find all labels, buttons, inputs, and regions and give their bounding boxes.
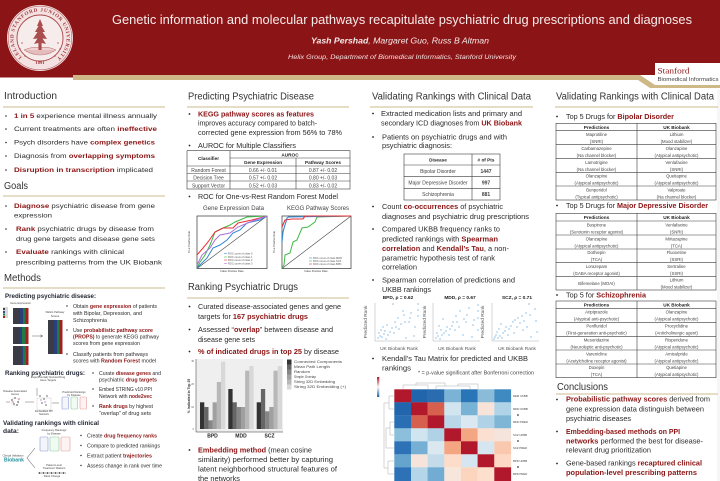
- chart: percent of indicated drugs in top 25: SCZ: [264, 434, 274, 440]
- bullet list: ranking: targets for 167 psychiatric drugs: [198, 312, 308, 321]
- subheading: validating rankings: Validating rankings with clinical: [3, 420, 99, 427]
- table: major depressive disorder drugs: Lithium: [670, 278, 684, 283]
- bullet: embedding method: Embedding method (mean cosine: [198, 446, 312, 455]
- table: bipolar disorder drugs: Valproate: [667, 187, 686, 192]
- bullet list: conclusions: population-level prescribing patterns: [566, 468, 697, 477]
- bullet: Kendall's Tau matrix: Kendall’s Tau Matrix for predicted and UKBB: [382, 354, 528, 363]
- subheading: validating rankings: data:: [3, 428, 19, 435]
- bullet list: ranking: Curated disease-associated genes and gene: [198, 302, 341, 311]
- bullet list: comparison methods: Compared UKBB frequency ranks to: [382, 225, 500, 234]
- bullet list: predicting disease: (PROPS) to generate KEGG pathway: [73, 334, 159, 340]
- chart: ROC gene expression data: ROC curve of class 2: [228, 258, 253, 262]
- bullet list: comparison methods: correlation and Kendall’s Tau, a non-: [382, 244, 510, 253]
- bullet list: UK Biobank extraction: Extracted medication lists and primary and: [381, 109, 522, 118]
- table: major depressive disorder drugs: (SSRI): [670, 271, 684, 276]
- table: bipolar disorder drugs: Lamotrigine: [585, 160, 608, 165]
- bullet: embedding method: [189, 446, 338, 481]
- table: schizophrenia drugs: (Atypical antipsychotic): [655, 317, 699, 322]
- icon: Stanford university seal: LELAND STANFORD JUNIOR UNIVERSITY: [10, 8, 70, 61]
- chart: ROC gene expression data: True Positive Rate: [187, 230, 191, 253]
- bullet list: predicting disease: scores with Random Forest model: [73, 358, 156, 364]
- table: bipolar disorder drugs: UK Biobank: [663, 125, 690, 130]
- bullet list: ranking drugs: “overlap” of drug sets: [99, 411, 151, 417]
- bullet list: KEGG features: KEGG pathway scores as features: [198, 110, 314, 118]
- table: schizophrenia drugs: Mesoridazine: [584, 338, 610, 342]
- table: patients by disease: 1447: [480, 169, 492, 175]
- table: major depressive disorder drugs: (SNRI): [670, 229, 684, 234]
- subheading: ranking psychiatric drugs: Ranking psychiatric drugs:: [5, 370, 85, 377]
- affiliation: Helix Group, Department of Biomedical Informatics, Stanford University: [288, 54, 517, 61]
- chart: MDD scatter: [422, 295, 480, 352]
- logo: Stanford Biomedical Informatics: Stanford: [658, 66, 690, 76]
- diagram: clinical validation workflow: by Disease: [47, 432, 61, 436]
- bullet list: conclusions: Probabilistic pathway scores derived from: [566, 395, 710, 404]
- table: bipolar disorder drugs: (Atypical antipsychotic): [575, 181, 619, 186]
- header banner: [0, 0, 720, 88]
- table: major depressive disorder drugs: (GABA receptor agonist): [573, 271, 620, 276]
- table: bipolar disorder drugs: (Mood stabilizer): [661, 139, 693, 144]
- table: AUROC for classifiers: 0.83 +/- 0.02: [309, 183, 337, 189]
- diagram: gene expression to pathway scores: Gene Expression: [10, 301, 31, 305]
- table: AUROC for classifiers: Gene Expression: [244, 160, 282, 165]
- chart: ROC gene expression data: ROC curve of class 3: [228, 261, 253, 265]
- chart: Kendall's Tau heatmap: *: [517, 414, 519, 420]
- bullet list: conclusions: relevant drug prioritization: [566, 446, 651, 455]
- bullet list: introduction: 1 in 5 experience mental illness annually: [14, 113, 158, 120]
- table: bipolar disorder drugs: Carbamazepine: [581, 146, 612, 151]
- bullet list: goals: Diagnose psychiatric disease from gene: [14, 203, 155, 210]
- diagram: drug ranking workflow: by Disease: [67, 393, 81, 397]
- diagram: drug ranking workflow: Predicted Rankings: [62, 390, 86, 394]
- table: schizophrenia drugs: Quetiapine: [666, 365, 687, 370]
- table: bipolar disorder drugs: (SNRI): [590, 139, 604, 144]
- chart: Kendall's Tau heatmap: SCZ PRED: [513, 446, 527, 450]
- table: schizophrenia drugs: Procyclidine: [665, 324, 689, 329]
- chart: Kendall's Tau heatmap: *: [517, 440, 519, 446]
- chart: percent of indicated drugs in top 25: BPD: [207, 434, 218, 440]
- chart: SCZ scatter: Predicted Rank: [480, 305, 486, 338]
- heading: methods: Methods: [4, 273, 41, 284]
- chart: ROC gene expression data: Gene Expression Data: [203, 205, 264, 212]
- table: major depressive disorder drugs: (SSRI): [670, 257, 684, 262]
- table: schizophrenia drugs: (Neuroleptic anti-psychotic): [570, 344, 623, 350]
- diagram: clinical validation workflow: [2, 428, 70, 478]
- bullet list: introduction: Disruption in transcription implicated: [14, 167, 153, 174]
- bullet list: predicting disease: scores from gene expression: [73, 341, 140, 347]
- bullet list: goals: prescribing patterns from the UK Biobank: [16, 260, 163, 266]
- diagram: drug ranking workflow: [3, 375, 86, 416]
- table: AUROC for classifiers: 0.80 +/- 0.03: [309, 175, 337, 181]
- bullet list: ranking: % of indicated drugs in top 25 by disease: [198, 347, 339, 356]
- table: major depressive disorder drugs: Sertraline: [667, 264, 686, 269]
- chart: ROC gene expression data: False Positive Rate: [220, 269, 244, 273]
- table: patients by disease: Major Depressive Disorder: [408, 180, 468, 186]
- table: major depressive disorder drugs: (TCA): [671, 243, 683, 248]
- table: major depressive disorder drugs: Predictions: [584, 215, 610, 220]
- bullet list: comparison methods: correlation: [382, 263, 417, 272]
- table: major depressive disorder drugs: Dothiepin: [587, 250, 606, 255]
- chart: BPD scatter: [363, 295, 420, 352]
- legend: ranking methods: String 32D Embedding: [294, 380, 335, 384]
- title: Genetic information and molecular pathways recapitulate psychiatric drug prescriptions and diagnoses: [112, 12, 692, 27]
- bullet list: ranking: [189, 302, 341, 356]
- chart: ROC gene expression data: ROC curve of class 1: [228, 255, 253, 259]
- chart: percent of indicated drugs in top 25: 20: [191, 383, 195, 386]
- icon: Stanford university seal: 1891: [35, 60, 45, 65]
- bullet list: comparison methods: Spearman correlation of predictions and: [382, 275, 515, 284]
- table: major depressive disorder drugs: Mirtazapine: [665, 236, 688, 241]
- table: bipolar disorder drugs: (Na channel blocker): [577, 153, 617, 158]
- heading: validating rankings: Validating Rankings with Clinical Data: [372, 92, 531, 102]
- bullet list: conclusions: networks performed the best for disease-: [566, 436, 704, 445]
- bullet list: goals: [5, 203, 163, 266]
- bullet list: KEGG features: [189, 110, 342, 150]
- table: patients by disease: Disease: [429, 158, 447, 162]
- table: AUROC for classifiers: 0.66 +/- 0.01: [249, 168, 277, 174]
- bullet list: conclusions: gene expression data distinguish between: [566, 405, 704, 414]
- chart: Kendall's Tau heatmap: MDD UKBB: [513, 407, 528, 411]
- subheading: bipolar disorder: Top 5 Drugs for Bipolar Disorder: [566, 112, 674, 121]
- chart: ROC gene expression data: ROC curve of class 0: [228, 252, 253, 256]
- bullet list: comparison methods: diagnoses and psychiatric drug prescriptions: [382, 212, 529, 221]
- table: patients by disease: [404, 154, 500, 200]
- table: schizophrenia drugs: Varenicline: [586, 351, 608, 356]
- bullet list: predicting disease: Use probabilistic pathway score: [73, 328, 153, 334]
- bullet list: ranking drugs: Network with node2vec: [99, 394, 152, 400]
- table: schizophrenia drugs: (Atypical antipsychotic): [655, 358, 699, 363]
- table: schizophrenia drugs: (First-generation anti-psychotic): [566, 331, 627, 336]
- bullet list: goals: Rank psychiatric drugs by disease from: [16, 226, 154, 233]
- bullet list: predicting disease: Obtain gene expression of patients: [73, 304, 157, 310]
- chart: ROC KEGG pathway scores: [272, 205, 351, 273]
- chart: Kendall's Tau heatmap: DEM UKBB: [513, 394, 528, 398]
- table: patients by disease: Bipolar Disorder: [420, 169, 456, 175]
- table: bipolar disorder drugs: (Atypical antipsychotic): [655, 181, 699, 186]
- table: AUROC for classifiers: Support Vector: [192, 183, 225, 189]
- chart: ROC KEGG pathway scores: KEGG Pathway Scores: [287, 205, 349, 212]
- diagram: clinical validation workflow: Biobank: [4, 458, 25, 464]
- table: major depressive disorder drugs: (Mood stabilizer): [661, 284, 693, 290]
- subheading: schizophrenia: Top 5 for Schizophrenia: [566, 290, 647, 300]
- bullet list: comparison methods: predicted rankings with Spearman: [382, 234, 498, 243]
- table: bipolar disorder drugs: (Na channel blocker): [657, 194, 697, 199]
- table: major depressive disorder drugs: (TCA): [591, 257, 603, 262]
- bullet list: UK Biobank extraction: psychiatric diagnosis:: [382, 141, 452, 150]
- table: AUROC for classifiers: Pathway Scores: [305, 160, 341, 165]
- chart: percent of indicated drugs in top 25: 0: [193, 428, 195, 431]
- bullet list: comparison methods: [372, 202, 529, 294]
- table: major depressive disorder drugs: [556, 213, 716, 290]
- chart: ROC gene expression data: [187, 205, 267, 273]
- table: AUROC for classifiers: [187, 151, 350, 189]
- bullet list: predicting disease: Schizophrenia: [73, 318, 108, 324]
- legend: ranking methods: Connected Components: [294, 360, 342, 364]
- table: AUROC for classifiers: AUROC: [281, 152, 299, 157]
- table: bipolar disorder drugs: (SNRI): [670, 167, 684, 172]
- chart: ROC KEGG pathway scores: ROC curve of class SCZ: [313, 259, 342, 263]
- logo: Stanford Biomedical Informatics: Biomedical Informatics: [658, 77, 719, 83]
- bullet list: KEGG features: corrected gene expression from 56% to 78%: [198, 128, 342, 137]
- table: schizophrenia drugs: Predictions: [584, 302, 610, 308]
- subheading: validating rankings: [3, 420, 99, 435]
- table: major depressive disorder drugs: UK Biobank: [663, 215, 690, 220]
- chart: Kendall's Tau heatmap: BPD PRED: [513, 472, 527, 476]
- diagram: drug ranking workflow: Experimentally Derived Drug: [31, 375, 66, 379]
- bullet list: goals: drug gene targets and disease gene sets: [16, 236, 156, 243]
- chart: percent of indicated drugs in top 25: MDD: [235, 434, 247, 440]
- table: bipolar disorder drugs: Venlafaxine: [665, 160, 688, 165]
- diagram: drug ranking workflow: Genes: [11, 392, 20, 396]
- table: patients by disease: Schizophrenia: [422, 192, 454, 198]
- heading: introduction: Introduction: [4, 91, 57, 102]
- diagram: gene expression to pathway scores: KEGG Pathway: [46, 310, 65, 314]
- chart: Kendall's Tau heatmap: MDD PRED: [513, 420, 528, 424]
- table: major depressive disorder drugs: Buspirone: [587, 222, 607, 227]
- chart: BPD scatter: BPD, ρ = 0.62: [383, 295, 414, 301]
- table: bipolar disorder drugs: [556, 123, 716, 200]
- chart: ROC KEGG pathway scores: ROC curve of class MDD: [313, 256, 342, 260]
- note: significance: * = p-value significant after Bonferroni correction: [418, 371, 534, 377]
- diagram: gene expression to pathway scores: [3, 301, 65, 365]
- table: schizophrenia drugs: Amisulpride: [665, 351, 688, 356]
- chart: ROC KEGG pathway scores: True Positive Rate: [272, 230, 276, 253]
- bullet: embedding method: latent neighborhood structural features of: [198, 465, 338, 474]
- table: patients by disease: # of Pts: [478, 158, 495, 162]
- diagram: clinical validation workflow: Rank Change: [44, 474, 61, 478]
- diagram: clinical validation workflow: Frequency Rankings: [42, 428, 67, 432]
- bullet list: KEGG features: AUROC for Multiple Classifiers: [198, 141, 296, 150]
- diagram: clinical validation workflow: Patient-Level: [46, 463, 62, 467]
- bullet list: introduction: Psych disorders have complex genetics: [14, 140, 155, 146]
- bullet list: introduction: Current treatments are often ineffective: [14, 126, 157, 133]
- table: bipolar disorder drugs: Maprotiline: [586, 132, 608, 137]
- chart: SCZ scatter: [480, 295, 539, 352]
- table: bipolar disorder drugs: Olanzapine: [586, 174, 608, 179]
- bullet list: predicting disease: with Bipolar, Depression, and: [72, 311, 142, 317]
- table: patients by disease: 881: [482, 192, 490, 198]
- table: schizophrenia drugs: Penfluridol: [586, 324, 607, 329]
- table: schizophrenia drugs: (Anticholinergic agent): [655, 331, 698, 336]
- table: bipolar disorder drugs: Quetiapine: [666, 174, 687, 179]
- table: major depressive disorder drugs: Fluoxetine: [667, 250, 687, 255]
- bullet: Kendall's Tau matrix: rankings: [382, 364, 411, 373]
- table: AUROC for classifiers: Random Forest: [191, 168, 226, 174]
- chart: Kendall's Tau heatmap: *: [517, 466, 519, 472]
- table: schizophrenia drugs: (TCA): [591, 372, 603, 377]
- bullet list: ranking drugs: Rank drugs by highest: [99, 404, 153, 410]
- bullet list: validating rankings: Compare to predicted rankings: [87, 444, 160, 450]
- bullet: embedding method: similarity) performed better by capturing: [198, 455, 333, 464]
- authors: Yash Pershad , Margaret Guo, Russ B Altman: [311, 36, 489, 46]
- chart: percent of indicated drugs in top 25: 10: [191, 406, 195, 409]
- chart: MDD scatter: MDD, ρ = 0.67: [444, 295, 476, 301]
- heading: conclusions: Conclusions: [557, 382, 608, 393]
- table: schizophrenia drugs: (Atypical antipsychotic): [655, 372, 699, 377]
- table: schizophrenia drugs: Risperidone: [665, 338, 689, 342]
- bullet list: UK Biobank extraction: [372, 109, 523, 150]
- bullet list: ranking drugs: [92, 371, 161, 417]
- chart: Kendall's Tau heatmap: [377, 377, 528, 481]
- table: patients by disease: 997: [482, 180, 490, 186]
- table: bipolar disorder drugs: Predictions: [584, 125, 610, 130]
- heading: predicting psychiatric disease: Predicting Psychiatric Disease: [188, 92, 314, 102]
- table: AUROC for classifiers: 0.52 +/- 0.03: [249, 183, 277, 189]
- panel: top drugs tables: [555, 92, 718, 378]
- table: major depressive disorder drugs: Venlafaxine: [665, 222, 688, 227]
- table: AUROC for classifiers: 0.87 +/- 0.02: [309, 168, 337, 174]
- legend: ranking methods: [287, 360, 346, 390]
- table: schizophrenia drugs: Olanzapine: [666, 310, 688, 315]
- diagram: clinical validation workflow: Clinical Validation: [2, 454, 24, 458]
- legend: ranking methods: Mean Path Length: [294, 365, 330, 369]
- bullet list: ranking drugs: psychiatric drug targets: [99, 378, 157, 384]
- panel: validating rankings with clinical data: [363, 92, 539, 481]
- chart: ROC KEGG pathway scores: ROC curve of class BPD: [313, 262, 342, 266]
- chart: Kendall's Tau heatmap: BPD UKBB: [513, 459, 527, 463]
- bullet list: conclusions: Gene-based rankings recaptured clinical: [566, 459, 702, 468]
- bullet list: UK Biobank extraction: secondary ICD diagnoses from UK Biobank: [381, 118, 523, 128]
- bullet list: validating rankings: Extract patient trajectories: [87, 454, 152, 460]
- legend: ranking methods: Simple Overlap: [294, 375, 316, 379]
- table: bipolar disorder drugs: Benperidol: [586, 187, 607, 192]
- table: schizophrenia drugs: (Acetylcholine receptor agonist): [566, 358, 627, 363]
- logo: Stanford Biomedical Informatics: [655, 63, 720, 85]
- subheading: major depressive disorder: Top 5 Drugs for Major Depressive Disorder: [566, 201, 708, 210]
- bullet list: ranking: Assessed “overlap” between disease and: [198, 325, 333, 334]
- bullet list: comparison methods: parametric hypothesis test of rank: [382, 253, 495, 262]
- table: AUROC for classifiers: Classifier: [198, 156, 219, 161]
- bullet: Kendall's Tau matrix: [372, 354, 528, 373]
- panel: predicting psychiatric disease: [187, 92, 351, 273]
- table: schizophrenia drugs: [556, 301, 716, 378]
- bullet list: validating rankings: Assess change in rank over time: [87, 464, 162, 470]
- bullet list: comparison methods: UKBB rankings: [382, 285, 431, 294]
- bullet list: validating rankings: [80, 434, 162, 470]
- panel: conclusions: [556, 382, 718, 477]
- diagram: drug ranking workflow: Disease Associated: [3, 389, 27, 393]
- table: bipolar disorder drugs: Olanzapine: [666, 146, 688, 151]
- chart: percent of indicated drugs in top 25: % Indicated in Top 25: [187, 379, 191, 413]
- chart: SCZ scatter: SCZ, ρ = 0.71: [502, 295, 532, 301]
- heading: validating rankings continued: Validating Rankings with Clinical Data: [556, 92, 714, 102]
- bullet list: conclusions: [556, 395, 710, 477]
- table: schizophrenia drugs: UK Biobank: [663, 302, 690, 308]
- chart: MDD scatter: UK Biobank Rank: [438, 346, 477, 352]
- panel: goals: [3, 181, 165, 266]
- panel: introduction: [3, 91, 165, 174]
- subheading: predicting psychiatric disease: Predicting psychiatric disease:: [5, 293, 96, 300]
- chart: BPD scatter: UK Biobank Rank: [380, 346, 419, 352]
- table: schizophrenia drugs: Aripiprazole: [585, 310, 608, 315]
- chart: percent of indicated drugs in top 25: 40: [191, 360, 195, 363]
- bullet list: goals: Evaluate rankings with clinical: [16, 249, 125, 256]
- chart: Kendall's Tau heatmap: SCZ UKBB: [513, 433, 527, 437]
- heading: ranking psychiatric drugs: Ranking Psychiatric Drugs: [188, 282, 298, 293]
- table: schizophrenia drugs: (Atypical antipsychotic): [655, 344, 699, 350]
- diagram: clinical validation workflow: Treatment Stations: [43, 466, 66, 470]
- bullet list: comparison methods: Count co-occurrences of psychiatric: [382, 202, 503, 211]
- table: major depressive disorder drugs: Bifemelane (MOAI): [578, 281, 615, 286]
- bullet list: KEGG features: improves accuracy compared to batch-: [198, 118, 317, 128]
- bullet list: predicting disease: [66, 304, 159, 364]
- legend: ranking methods: String 32D Embedding (+): [294, 385, 346, 389]
- legend: ranking methods: Random: [294, 370, 310, 374]
- table: bipolar disorder drugs: (Typical antipsychotic): [575, 194, 618, 199]
- bullet list: ranking drugs: Curate disease genes and: [99, 371, 161, 377]
- table: bipolar disorder drugs: (Atypical antipsychotic): [655, 153, 699, 158]
- bullet list: introduction: [5, 113, 158, 174]
- heading: goals: Goals: [4, 181, 28, 192]
- bullet list: goals: expression: [14, 212, 52, 220]
- diagram: drug ranking workflow: Gene Targets: [40, 378, 57, 382]
- table: major depressive disorder drugs: Olanzapine: [586, 236, 608, 241]
- diagram: gene expression to pathway scores: Scores: [51, 314, 60, 318]
- chart: BPD scatter: Predicted Rank: [363, 305, 369, 338]
- diagram: drug ranking workflow: Embedded PPI: [35, 409, 53, 413]
- table: major depressive disorder drugs: (Serotonin receptor agonist): [570, 229, 624, 234]
- bullet: ROC model: ROC for One-vs-Rest Random Forest Model: [198, 192, 338, 201]
- table: major depressive disorder drugs: (Atypical antipsychotic): [575, 243, 619, 248]
- diagram: drug ranking workflow: Network: [39, 412, 50, 416]
- panel: methods: [2, 273, 165, 478]
- bullet list: conclusions: psychiatric diseases: [566, 414, 631, 423]
- table: AUROC for classifiers: Decision Tree: [193, 175, 224, 181]
- bullet list: predicting disease: Classify patients from pathways: [73, 352, 148, 358]
- table: bipolar disorder drugs: (Na channel blocker): [577, 167, 617, 172]
- panel: ranking psychiatric drugs: [187, 282, 349, 481]
- table: bipolar disorder drugs: Lithium: [670, 132, 684, 137]
- bullet list: ranking drugs: Embed STRING v10 PPI: [99, 387, 152, 393]
- table: AUROC for classifiers: 0.57 +/- 0.02: [249, 175, 277, 181]
- bullet list: ranking: disease gene sets: [198, 335, 255, 344]
- bullet list: UK Biobank extraction: Patients on psychiatric drugs and with: [382, 132, 507, 141]
- chart: percent of indicated drugs in top 25: [187, 359, 283, 440]
- table: schizophrenia drugs: (Atypical anti-psychotic): [574, 317, 620, 322]
- bullet list: introduction: Diagnosis from overlapping symptoms: [14, 153, 155, 160]
- bullet list: conclusions: Embedding-based methods on PPI: [566, 427, 680, 436]
- chart: SCZ scatter: UK Biobank Rank: [498, 346, 537, 352]
- chart: MDD scatter: Predicted Rank: [422, 305, 428, 338]
- bullet list: validating rankings: Create drug frequency ranks: [87, 434, 157, 440]
- chart: ROC KEGG pathway scores: False Positive Rate: [304, 269, 328, 273]
- table: schizophrenia drugs: Doxepin: [589, 365, 605, 370]
- table: major depressive disorder drugs: Lorazepam: [586, 264, 608, 269]
